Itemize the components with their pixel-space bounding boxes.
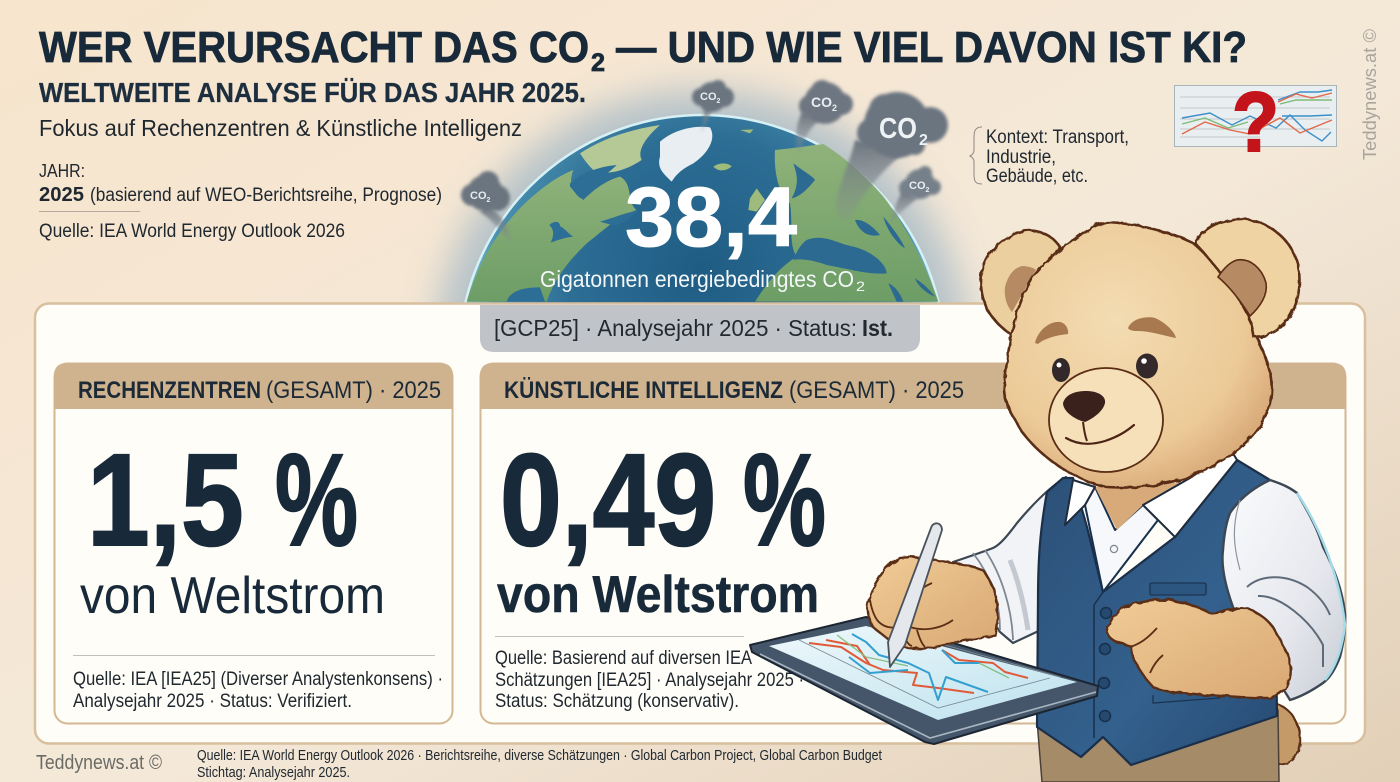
source note right: Schätzungen [IEA25] · Analysejahr 2025 · xyxy=(495,670,804,691)
status badge: [GCP25] · Analysejahr 2025 · Status: xyxy=(494,315,857,341)
left ear xyxy=(981,231,1060,335)
right sleeve xyxy=(1222,480,1345,700)
icon: line chart with question mark xyxy=(1174,75,1336,169)
key figure: 38,4 gigatons: 2 xyxy=(856,278,865,294)
CO2 cloud large xyxy=(836,92,948,221)
status badge xyxy=(480,305,920,352)
collar xyxy=(1065,450,1237,537)
value 0,49 %: 0,49 xyxy=(500,426,747,573)
panel: Rechenzentren xyxy=(54,363,453,724)
label von Weltstrom bold: von Weltstrom xyxy=(497,566,819,624)
trousers xyxy=(1037,710,1279,782)
title: 2 xyxy=(591,49,605,77)
CO2 cloud large: 2 xyxy=(919,132,928,149)
year and source block xyxy=(39,160,442,242)
source note right: Status: Schätzung (konservativ). xyxy=(495,691,739,712)
teddy bear illustration xyxy=(750,219,1345,782)
footer sources: Quelle: IEA World Energy Outlook 2026 · Berichtsreihe, diverse Schätzungen · Global Carbon Project, Global Carbon Budget xyxy=(197,748,882,764)
CO2 cloud small left: 2 xyxy=(486,197,490,204)
right ear xyxy=(1195,219,1300,337)
CO2 cloud right small: 2 xyxy=(926,187,930,194)
KI header xyxy=(480,363,1346,409)
value 1,5 %: 1,5 xyxy=(87,426,275,573)
globe with emission clouds xyxy=(434,90,970,626)
left paw with stylus xyxy=(867,523,997,667)
context note with bracket: Kontext: Transport, xyxy=(986,127,1129,148)
left sleeve xyxy=(953,477,1066,643)
right paw xyxy=(1107,600,1291,698)
title: — UND WIE VIEL DAVON IST KI? xyxy=(616,23,1247,72)
footer brand: Teddynews.at © xyxy=(36,752,162,774)
CO2 cloud upper right: CO xyxy=(811,94,832,110)
footer sources: Stichtag: Analysejahr 2025. xyxy=(197,765,350,781)
Rechenzentren header xyxy=(54,363,453,409)
Rechenzentren header: (GESAMT) · 2025 xyxy=(266,377,441,404)
year and source block: (basierend auf WEO-Berichtsreihe, Prognose) xyxy=(90,185,442,206)
value 1,5 %: % xyxy=(275,426,358,573)
context note with bracket: Gebäude, etc. xyxy=(986,166,1088,187)
CO2 cloud right small: CO xyxy=(909,180,926,192)
head xyxy=(1004,222,1272,488)
tail xyxy=(1274,703,1300,764)
Rechenzentren header: RECHENZENTREN xyxy=(78,377,261,404)
CO2 cloud upper right xyxy=(796,80,853,155)
CO2 cloud top center: CO xyxy=(700,91,716,103)
CO2 cloud right small xyxy=(889,166,941,226)
focus line: Fokus auf Rechenzentren & Künstliche Intelligenz xyxy=(39,115,522,141)
key figure: 38,4 gigatons xyxy=(540,170,865,294)
context note with bracket xyxy=(970,127,1129,187)
KI header: (GESAMT) · 2025 xyxy=(789,377,964,404)
status badge: Ist. xyxy=(862,315,893,341)
CO2 cloud upper right: 2 xyxy=(832,103,837,113)
tablet xyxy=(750,617,1098,744)
context note with bracket: Industrie, xyxy=(986,147,1056,168)
subtitle: WELTWEITE ANALYSE FÜR DAS JAHR 2025. xyxy=(39,77,586,108)
KI header: KÜNSTLICHE INTELLIGENZ xyxy=(504,377,783,404)
vest xyxy=(1037,460,1277,765)
label von Weltstrom: von Weltstrom xyxy=(80,567,385,625)
year and source block: Quelle: IEA World Energy Outlook 2026 xyxy=(39,221,345,242)
key figure: 38,4 gigatons: Gigatonnen energiebedingtes CO xyxy=(540,266,854,292)
value 0,49 %: % xyxy=(743,426,826,573)
icon: line chart with question mark: ? xyxy=(1232,75,1279,169)
shirt front and neck xyxy=(1085,482,1190,592)
panel: Künstliche Intelligenz xyxy=(480,363,1346,724)
vest details xyxy=(1094,583,1220,738)
vertical watermark: Teddynews.at © xyxy=(1359,29,1380,160)
CO2 cloud small left xyxy=(461,171,512,245)
CO2 cloud large: CO xyxy=(879,113,917,145)
CO2 cloud top center xyxy=(692,80,734,133)
CO2 cloud small left: CO xyxy=(470,190,486,202)
CO2 cloud top center: 2 xyxy=(716,98,720,105)
year and source block: JAHR: xyxy=(39,160,85,181)
main panel xyxy=(35,304,1365,744)
year and source block: 2025 xyxy=(39,184,84,206)
face xyxy=(1035,317,1176,472)
source note left: Quelle: IEA [IEA25] (Diverser Analystenkonsens) · xyxy=(73,669,443,690)
source note right: Quelle: Basierend auf diversen IEA xyxy=(495,648,752,669)
title: WER VERURSACHT DAS CO xyxy=(39,23,589,72)
key figure: 38,4 gigatons: 38,4 xyxy=(625,170,797,264)
source note left: Analysejahr 2025 · Status: Verifiziert. xyxy=(73,691,352,712)
